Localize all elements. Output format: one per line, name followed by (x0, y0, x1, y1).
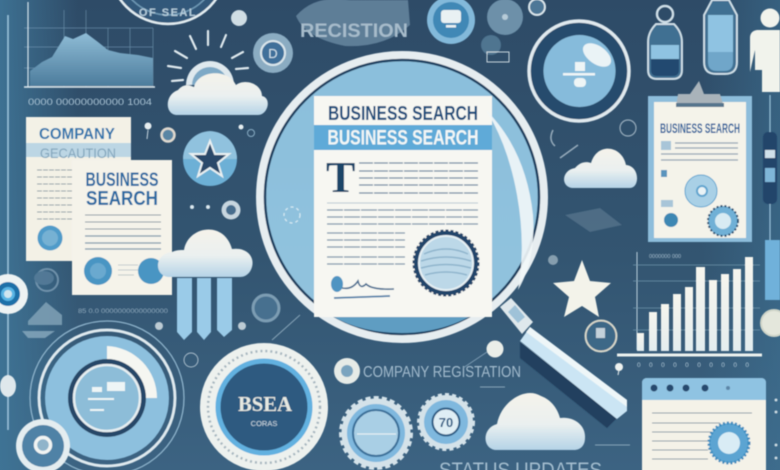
panel: circular badge (200, 343, 328, 470)
icon: gray circle (481, 0, 523, 62)
faint icons lower left (22, 269, 246, 367)
bar chart: 0000000 000 (649, 254, 681, 260)
panel: circular badge: CORAS (251, 419, 277, 428)
faint icons lower left: 85 0.0 0000000000000000 (78, 308, 168, 315)
drop cap: T (326, 153, 355, 202)
faint marks (548, 120, 636, 265)
icon: right edge circle (761, 310, 780, 336)
icon: small ring bottom left (16, 419, 70, 470)
seal (414, 231, 478, 295)
icon: registration bullet (334, 358, 360, 384)
panel: business search document (72, 160, 172, 295)
area chart (24, 2, 155, 107)
right column bar (765, 240, 780, 300)
top seal: OF SEAL (139, 7, 197, 19)
icon: bottle 1 (648, 6, 682, 79)
icon: oval marker (0, 375, 16, 397)
icon: cloud mid right (564, 149, 637, 188)
gear 1 (342, 398, 410, 468)
white wedge (107, 346, 157, 398)
axis labels: 0000 00000000000 1004 (28, 97, 152, 107)
faint circle icon (253, 295, 279, 321)
sun and cloud icon (168, 31, 268, 115)
panel: company document: GECAUTION (40, 145, 116, 161)
heading: business search dark: BUSINESS SEARCH (328, 102, 478, 125)
icon: bottle 2 (704, 0, 737, 74)
lens bottom shade (316, 305, 488, 333)
heading: business search: BUSINESS (86, 170, 158, 191)
heading: business search light: BUSINESS SEARCH (328, 126, 478, 150)
heading: company: COMPANY (39, 126, 115, 143)
icon: white star (553, 260, 611, 317)
panel: company document (26, 117, 131, 261)
small decorative icons left (144, 10, 254, 220)
label: company registration: COMPANY REGISTATION (363, 364, 521, 381)
left vertical line (7, 15, 9, 430)
bar chart (617, 252, 762, 369)
icon: cloud bottom (485, 393, 585, 450)
top seal (109, 0, 227, 24)
faint registration blob: RECISTION (300, 21, 408, 42)
icon: left eye circle (0, 274, 28, 314)
signature (331, 276, 394, 298)
icon: top right ring small (529, 0, 545, 15)
small right marks (774, 398, 778, 460)
bar chart: 0 0 0 0 0 0 0 0 0 0 (637, 362, 749, 369)
icon: cloud with columns (158, 230, 253, 340)
icon: ring document (586, 320, 616, 352)
panel: lens icon top right (529, 21, 629, 121)
small line marks (272, 315, 630, 445)
clip (676, 81, 724, 107)
icon: monitor circle (427, 0, 475, 44)
icon: top small circle (253, 33, 293, 73)
badge text: BSEA (238, 392, 293, 416)
pin icon (615, 363, 623, 375)
panel: business search document: SEARCH (86, 187, 158, 210)
icon: thermometer (763, 95, 777, 240)
icon: star badge (183, 131, 237, 186)
gear 2 (419, 395, 473, 449)
lens highlight (486, 110, 533, 290)
handle (500, 298, 627, 428)
gear 2: 70 (439, 415, 453, 430)
faint registration blob (296, 0, 410, 46)
panel: lens document (314, 96, 492, 317)
icon: top small circle: D (268, 46, 278, 61)
magnifying glass (260, 55, 627, 428)
panel: dial gauge (30, 321, 184, 470)
panel: browser window (642, 378, 766, 470)
panel: clipboard (648, 81, 752, 242)
gear seal (709, 423, 749, 463)
area series (30, 33, 153, 86)
icon: pin right (463, 340, 504, 368)
icon: person (750, 8, 780, 92)
